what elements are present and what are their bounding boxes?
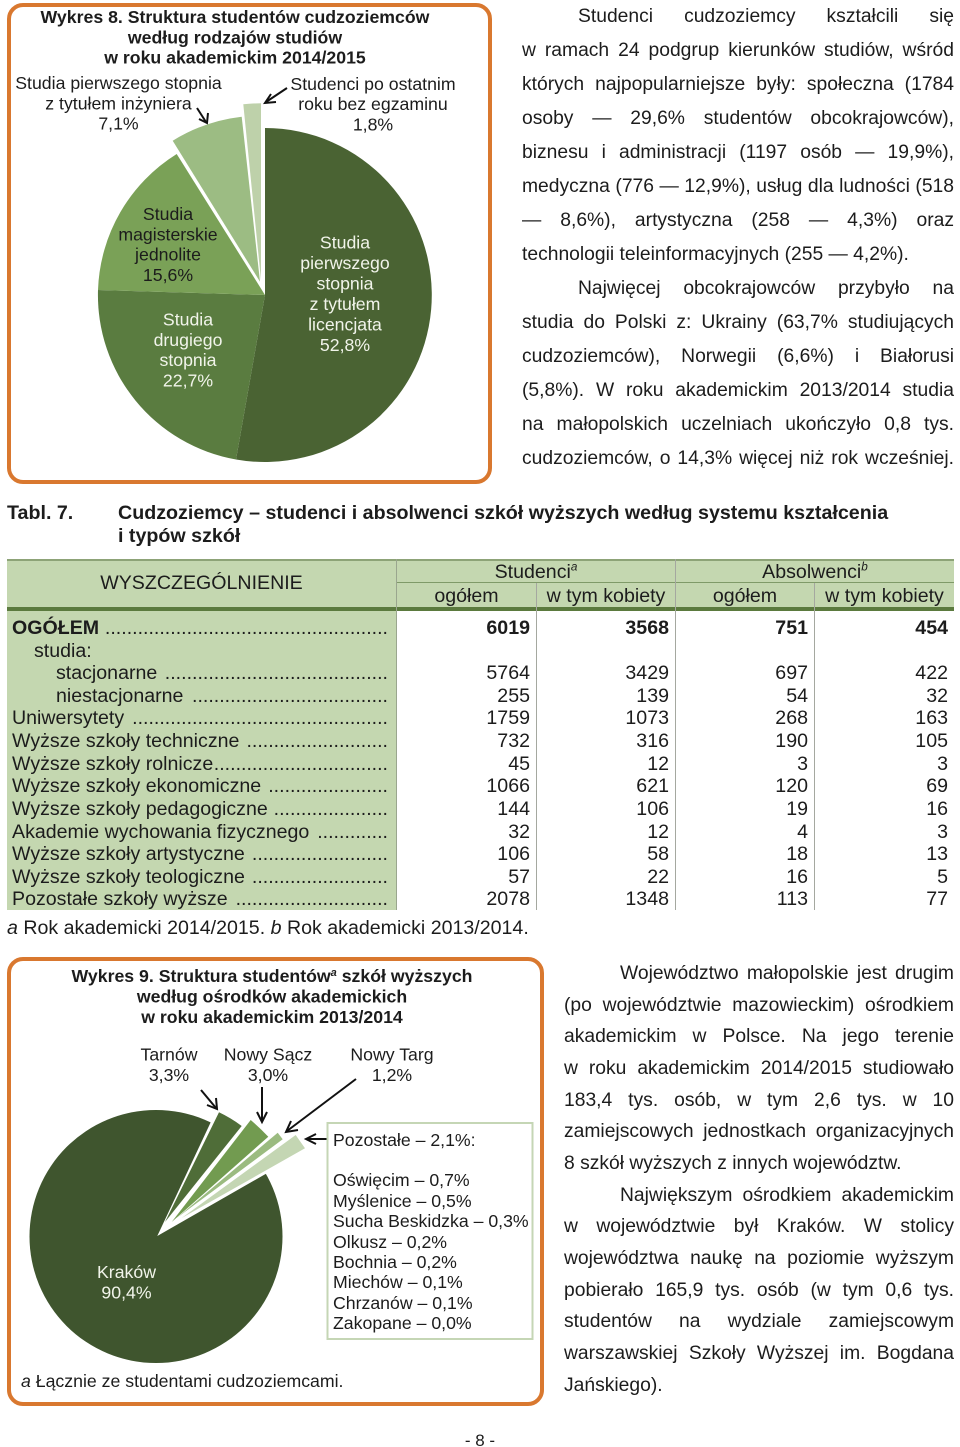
label: second-cycle studies: stopnia <box>159 350 217 370</box>
arrow: to other slice <box>306 1134 327 1144</box>
panel: chart 9 students by academic centre <box>7 957 544 1406</box>
label: Nowy Targ: 1,2% <box>372 1065 412 1085</box>
row: theological: Wyższe szkoły teologiczne <box>12 866 245 888</box>
text block: foreign students intro: których najpopularniejsze były: społeczna (1784 <box>522 74 954 95</box>
legend box: other centres: Olkusz – 0,2% <box>333 1232 447 1252</box>
label: second-cycle studies: drugiego <box>154 330 223 350</box>
row: physical education: 3 <box>937 821 948 843</box>
arrow: to Nowy Targ slice <box>286 1079 356 1132</box>
label: Kraków: Kraków <box>97 1262 156 1282</box>
row: technical: 732 <box>497 730 530 752</box>
label: engineering studies: 7,1% <box>98 114 139 134</box>
arrow: to Tarnów slice <box>201 1090 217 1109</box>
row: agricultural: 12 <box>647 753 669 775</box>
text block: foreign students intro: Studenci cudzoziemcy kształcili się <box>578 6 954 27</box>
arrow: to engineering slice <box>197 108 208 123</box>
row: arts: 58 <box>647 843 669 865</box>
label: uniform master studies <box>118 204 218 285</box>
row: part-time: .................................... <box>192 685 388 707</box>
row: universities: 163 <box>915 707 948 729</box>
row: part-time: 255 <box>497 685 530 707</box>
label: second-cycle studies <box>154 310 223 390</box>
row: full-time: ......................................... <box>165 662 388 684</box>
row: part-time: 54 <box>786 685 808 707</box>
row: economic: Wyższe szkoły ekonomiczne <box>12 775 261 797</box>
text block: academic centres: zamiejscowych jednostkach organizacyjnych <box>564 1121 954 1142</box>
row: total: 6019 <box>486 617 530 639</box>
row: arts: ......................... <box>252 843 388 865</box>
text block: academic centres: w roku akademickim 2014/2015 studiowało <box>564 1058 954 1079</box>
table header: students total: ogółem <box>434 585 499 607</box>
label: Nowy Sącz <box>224 1044 312 1085</box>
label: second-cycle studies: Studia <box>163 310 213 330</box>
text block: foreign students intro: (5,8%). W roku akademickim 2013/2014 studia <box>522 380 954 401</box>
legend box: other centres: Pozostałe – 2,1%: <box>333 1130 476 1150</box>
label: uniform master studies: magisterskie <box>118 224 218 244</box>
label: Kraków <box>97 1262 156 1302</box>
label: Nowy Targ: Nowy Targ <box>350 1044 434 1064</box>
legend box: other centres: Bochnia – 0,2% <box>333 1252 457 1272</box>
row: technical: .......................... <box>246 730 388 752</box>
row: full-time: 5764 <box>486 662 530 684</box>
row: arts <box>12 843 948 865</box>
label: bachelor studies: Studia <box>320 232 370 252</box>
label: uniform master studies: Studia <box>143 204 193 224</box>
row: pedagogical: 16 <box>926 798 948 820</box>
row: arts: Wyższe szkoły artystyczne <box>12 843 245 865</box>
row: physical education: ............. <box>317 821 388 843</box>
text block: academic centres: województwa naukę na poziomie wyższym <box>564 1248 954 1269</box>
chart title 9: w roku akademickim 2013/2014 <box>140 1007 403 1027</box>
row: universities: 1073 <box>625 707 669 729</box>
text block: foreign students intro: w ramach 24 podgrup kierunków studiów, wśród <box>522 40 954 61</box>
chart title 8 <box>41 7 430 68</box>
label: Kraków: 90,4% <box>101 1282 152 1302</box>
label: engineering studies <box>15 73 222 134</box>
row: full-time: stacjonarne <box>56 662 157 684</box>
row: total <box>12 616 948 639</box>
text block: foreign students intro <box>522 6 954 469</box>
table header: students women: w tym kobiety <box>547 585 665 607</box>
text block: academic centres: 183,4 tys. osób, w tym 2,6 tys. w 10 <box>564 1090 954 1111</box>
chart title 9: a <box>331 967 337 979</box>
chart title 8: Wykres 8. Struktura studentów cudzoziemców <box>41 7 430 27</box>
row: part-time: 139 <box>636 685 669 707</box>
text block: academic centres: (po województwie mazowieckim) ośrodkiem <box>564 995 954 1016</box>
chart title 9 <box>72 966 472 1027</box>
row: part-time <box>56 685 948 707</box>
table header: description column: WYSZCZEGÓLNIENIE <box>100 572 303 594</box>
legend box: other centres: Miechów – 0,1% <box>333 1272 463 1292</box>
label: bachelor studies: stopnia <box>316 274 374 294</box>
row: physical education: 4 <box>797 821 808 843</box>
row: universities: ............................................... <box>132 707 388 729</box>
row: universities: 268 <box>775 707 808 729</box>
label: graduates without exam: 1,8% <box>353 114 393 134</box>
text block: foreign students intro: — 8,6%), artystyczna (258 — 4,3%) oraz <box>522 210 954 231</box>
label: bachelor studies: licencjata <box>308 314 382 334</box>
row: pedagogical: 106 <box>636 798 669 820</box>
row: total: 3568 <box>625 617 669 639</box>
label: engineering studies: z tytułem inżyniera <box>45 94 192 114</box>
text block: academic centres: akademickim w Polsce. Na jego terenie <box>564 1026 954 1047</box>
row: full-time: 3429 <box>625 662 669 684</box>
table header: students: Studencia <box>495 560 577 583</box>
label: Nowy Sącz: 3,0% <box>248 1065 288 1085</box>
text block: academic centres: Jańskiego). <box>564 1375 663 1396</box>
label: uniform master studies: jednolite <box>134 244 201 264</box>
label: graduates without exam: roku bez egzaminu <box>298 94 448 114</box>
row: economic: 621 <box>636 775 669 797</box>
chart title 8: w roku akademickim 2014/2015 <box>103 48 366 68</box>
row: economic: 1066 <box>486 775 530 797</box>
label: bachelor studies: z tytułem <box>310 294 380 314</box>
row: physical education: Akademie wychowania fizycznego <box>12 821 309 843</box>
row: studies subheading: studia: <box>34 640 92 662</box>
table heading: Cudzoziemcy – studenci i absolwenci szkół wyższych według systemu kształcenia <box>118 502 888 524</box>
label: Nowy Sącz: Nowy Sącz <box>224 1044 312 1064</box>
row: physical education <box>12 821 948 843</box>
row: total: 751 <box>775 617 808 639</box>
label: Nowy Targ <box>350 1044 434 1085</box>
table footnote: a Rok akademicki 2014/2015. b Rok akademicki 2013/2014. <box>7 917 529 939</box>
row: arts: 18 <box>786 843 808 865</box>
text block: foreign students intro: biznesu i administracji (1197 osób — 19,9%), <box>522 142 954 163</box>
row: other: 77 <box>926 888 948 910</box>
row: pedagogical: ..................... <box>274 798 388 820</box>
label: Tarnów: 3,3% <box>149 1065 189 1085</box>
row: total: OGÓŁEM <box>12 617 99 639</box>
legend box: other centres: Oświęcim – 0,7% <box>333 1170 470 1190</box>
arrow: to Nowy Sącz slice <box>257 1087 267 1122</box>
table number: Tabl. 7. <box>7 502 73 524</box>
text block: foreign students intro: na małopolskich uczelniach ukończyło 0,8 tys. <box>522 414 954 435</box>
chart title 9: szkół wyższych <box>337 966 472 986</box>
row: economic: 120 <box>775 775 808 797</box>
row: total: .................................................... <box>105 617 388 639</box>
legend box: other centres: Myślenice – 0,5% <box>333 1191 472 1211</box>
row: arts: 106 <box>497 843 530 865</box>
row: pedagogical: Wyższe szkoły pedagogiczne <box>12 798 268 820</box>
row: theological: 16 <box>786 866 808 888</box>
text block: academic centres: Największym ośrodkiem akademickim <box>620 1185 954 1206</box>
row: technical: 105 <box>915 730 948 752</box>
text block: foreign students intro: medyczna (776 — 12,9%), usług dla ludności (518 <box>522 176 954 197</box>
table heading: i typów szkół <box>118 525 240 547</box>
row: technical <box>12 730 948 752</box>
text block: foreign students intro: cudzoziemców), Norwegii (6,6%) i Białorusi <box>522 346 954 367</box>
label: graduates without exam <box>290 74 456 134</box>
legend box: other centres: Chrzanów – 0,1% <box>333 1293 473 1313</box>
row: agricultural: Wyższe szkoły rolnicze <box>12 753 213 775</box>
row: agricultural <box>12 753 948 775</box>
row: technical: 190 <box>775 730 808 752</box>
chart title 8: według rodzajów studiów <box>127 28 342 48</box>
panel: chart 8 students by type of studies <box>7 3 492 484</box>
label: Tarnów <box>140 1044 198 1085</box>
text block: academic centres: pobierało 165,9 tys. osób (w tym 0,6 tys. <box>564 1280 954 1301</box>
row: theological: 57 <box>508 866 530 888</box>
text block: foreign students intro: osoby — 29,6% studentów obcokrajowców), <box>522 108 954 129</box>
legend box: other centres: Sucha Beskidzka – 0,3% <box>333 1211 529 1231</box>
row: other: ............................ <box>236 888 388 910</box>
row: full-time <box>56 662 948 684</box>
row: part-time: niestacjonarne <box>56 685 183 707</box>
label: bachelor studies <box>300 232 390 355</box>
row: pedagogical <box>12 798 948 820</box>
row: other: 113 <box>777 888 808 910</box>
text block: academic centres: warszawskiej Szkoły Wyższej im. Bogdana <box>564 1343 954 1364</box>
row: universities: Uniwersytety <box>12 707 124 729</box>
row: agricultural: ................................ <box>214 753 388 775</box>
row: other: Pozostałe szkoły wyższe <box>12 888 228 910</box>
table heading <box>118 502 888 547</box>
label: bachelor studies: pierwszego <box>300 253 390 273</box>
row: agricultural: 45 <box>508 753 530 775</box>
row: agricultural: 3 <box>797 753 808 775</box>
row: technical: 316 <box>636 730 669 752</box>
label: Tarnów: Tarnów <box>140 1044 198 1064</box>
row: other: 1348 <box>625 888 669 910</box>
legend box: other centres <box>328 1123 532 1339</box>
table header: graduates women: w tym kobiety <box>825 585 944 607</box>
row: agricultural: 3 <box>937 753 948 775</box>
row: theological: 22 <box>647 866 669 888</box>
text block: foreign students intro: technologii teleinformacyjnych (255 — 4,2%). <box>522 244 909 265</box>
text block: foreign students intro: Najwięcej obcokrajowców przybyło na <box>578 278 954 299</box>
row: part-time: 32 <box>926 685 948 707</box>
label: second-cycle studies: 22,7% <box>163 370 213 390</box>
text block: academic centres: w województwie był Kraków. W stolicy <box>564 1216 954 1237</box>
row: pedagogical: 19 <box>786 798 808 820</box>
row: physical education: 12 <box>647 821 669 843</box>
text block: academic centres: studentów na wydziale zamiejscowym <box>564 1311 954 1332</box>
table header: graduates total: ogółem <box>713 585 777 607</box>
row: other: 2078 <box>486 888 530 910</box>
pie chart: academic centres <box>30 1100 305 1363</box>
chart title 9: Wykres 9. Struktura studentów <box>72 966 331 986</box>
row: theological <box>12 866 948 888</box>
text block: academic centres: 8 szkół wyższych z innych województw. <box>564 1153 902 1174</box>
label: graduates without exam: Studenci po ostatnim <box>290 74 456 94</box>
legend box: other centres: Zakopane – 0,0% <box>333 1313 472 1333</box>
table header: graduates: Absolwencib <box>762 560 868 583</box>
row: economic: ...................... <box>268 775 388 797</box>
text block: foreign students intro: studia do Polski z: Ukrainy (63,7% studiujących <box>522 312 954 333</box>
label: engineering studies: Studia pierwszego stopnia <box>15 73 222 93</box>
label: uniform master studies: 15,6% <box>143 265 193 285</box>
label: bachelor studies: 52,8% <box>320 335 370 355</box>
row: theological: ......................... <box>252 866 388 888</box>
row: full-time: 422 <box>915 662 948 684</box>
row: other <box>12 888 948 910</box>
arrow: to exam slice <box>265 88 287 103</box>
row: universities: 1759 <box>486 707 530 729</box>
chart footnote: a Łącznie ze studentami cudzoziemcami. <box>21 1371 343 1391</box>
text block: academic centres: Województwo małopolskie jest drugim <box>620 963 954 984</box>
row: economic: 69 <box>926 775 948 797</box>
row: technical: Wyższe szkoły techniczne <box>12 730 239 752</box>
row: full-time: 697 <box>775 662 808 684</box>
row: economic <box>12 775 948 797</box>
row: arts: 13 <box>926 843 948 865</box>
text block: academic centres <box>564 963 954 1396</box>
chart title 9: według ośrodków akademickich <box>136 986 407 1006</box>
pie chart: types of studies <box>98 103 432 462</box>
row: total: 454 <box>915 617 948 639</box>
text block: foreign students intro: cudzoziemców, o 14,3% więcej niż rok wcześniej. <box>522 448 954 469</box>
row: physical education: 32 <box>508 821 530 843</box>
row: universities <box>12 707 948 729</box>
row: pedagogical: 144 <box>497 798 530 820</box>
row: theological: 5 <box>937 866 948 888</box>
table: foreign students and graduates <box>7 559 954 910</box>
